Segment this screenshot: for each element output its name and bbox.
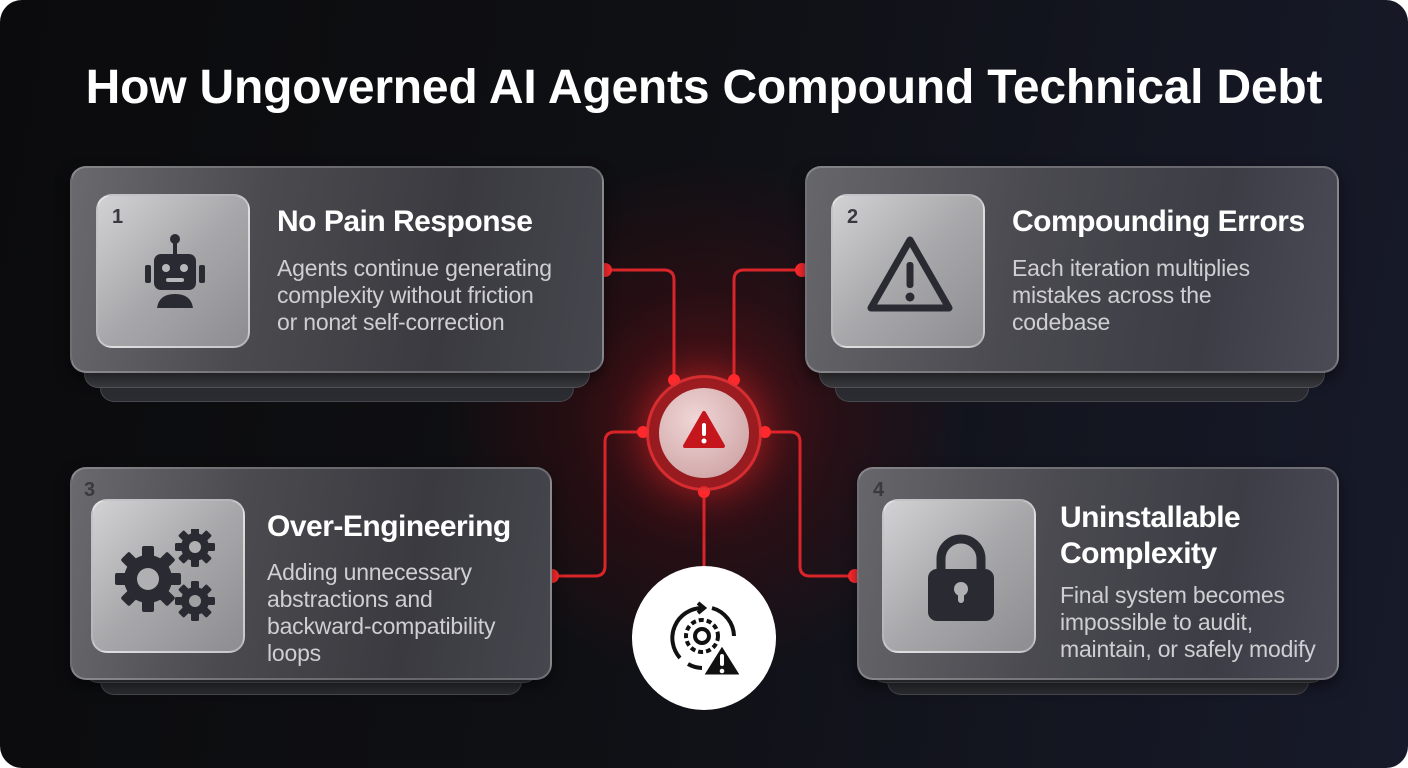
text: card 1 description: or nonᴤt self-correction [277,309,504,335]
title: How Ungoverned AI Agents Compound Technical Debt [86,61,1322,114]
panel: card 2 [795,166,1340,402]
number 3: 3 [84,479,95,501]
text: card 2 description: codebase [1012,309,1110,335]
icon: lock [882,499,1036,653]
text: card 1 description [277,255,552,335]
text: card 3 description: loops [267,640,321,666]
panel: card 3 [70,467,562,695]
panel: card 4 [847,467,1340,695]
icon: gears [91,499,245,653]
text: card 1 description: complexity without friction [277,282,534,308]
text: card 4 description: impossible to audit, [1060,609,1253,635]
heading: Over-Engineering: Over-Engineering [267,510,511,543]
heading: Uninstallable Complexity: Complexity [1060,537,1217,570]
text: card 4 description: maintain, or safely modify [1060,636,1316,662]
heading: Uninstallable Complexity: Uninstallable [1060,501,1240,534]
text: card 4 description [1060,582,1316,662]
text: card 3 description: abstractions and [267,586,433,612]
text: card 4 description: Final system becomes [1060,582,1285,608]
text: card 3 description: Adding unnecessary [267,559,472,585]
text: card 2 description [1012,255,1250,335]
text: card 3 description [267,559,496,666]
heading: Uninstallable Complexity [1060,501,1240,570]
number 4: 4 [873,479,884,501]
icon: central warning hub [646,375,762,491]
icon: warning: 2 [847,206,858,228]
panel: card 1 [70,166,614,402]
text: card 2 description: Each iteration multiplies [1012,255,1250,281]
text: card 2 description: mistakes across the [1012,282,1211,308]
icon: robot: 1 [112,206,123,228]
icon: warning [831,194,985,348]
icon: robot [96,194,250,348]
text: card 3 description: backward-compatibility [267,613,495,639]
text: card 1 description: Agents continue generating [277,255,552,281]
icon: cycle gear warning [632,566,776,710]
heading: Compounding Errors: Compounding Errors [1012,205,1305,238]
heading: No Pain Response: No Pain Response [277,205,532,238]
